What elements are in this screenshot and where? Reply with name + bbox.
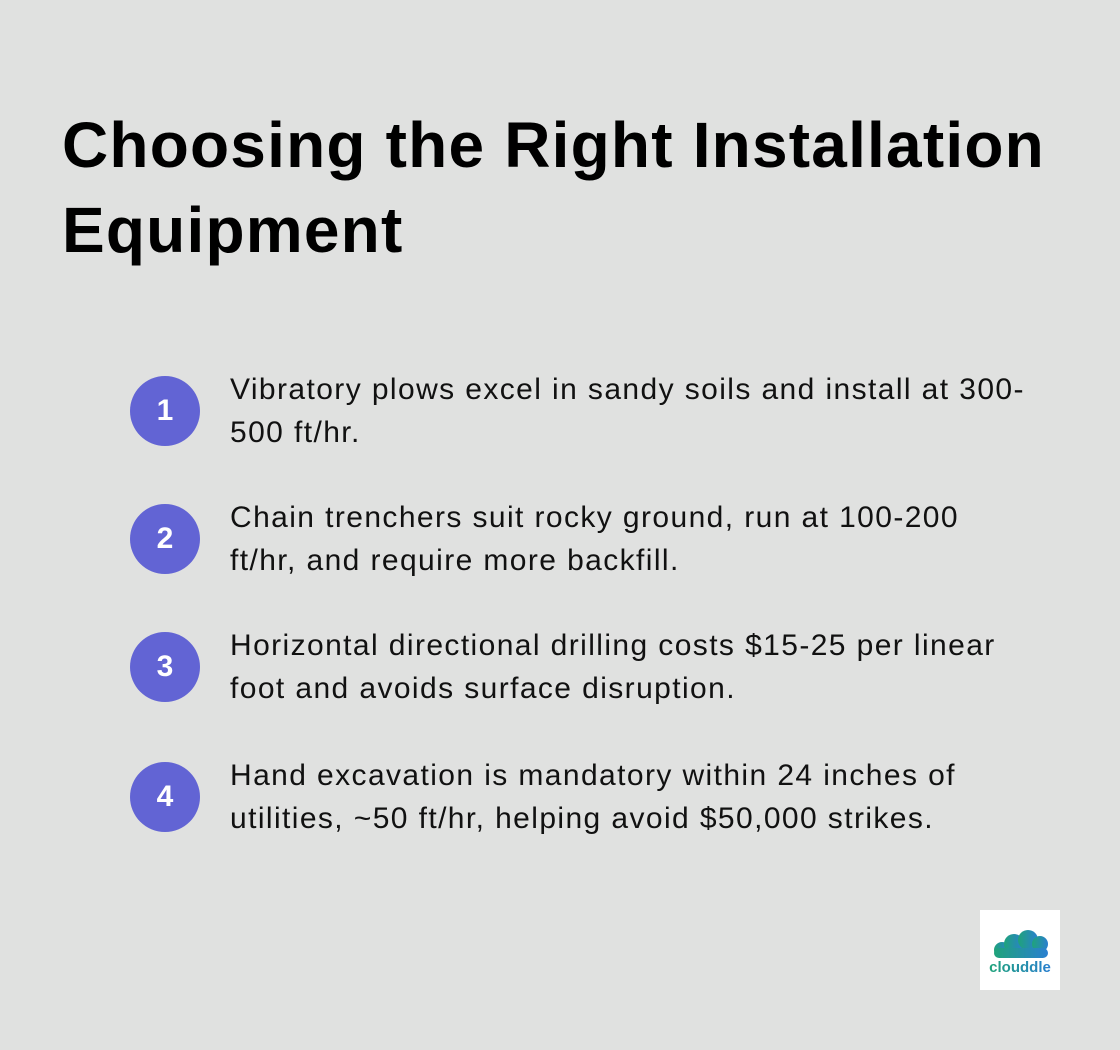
- item 2: Chain trenchers suit rocky ground, run at 100-200: [230, 501, 959, 534]
- item 2: ft/hr, and require more backfill.: [230, 544, 680, 577]
- item 1: Vibratory plows excel in sandy soils and install at 300-: [230, 373, 1025, 406]
- item 4: utilities, ~50 ft/hr, helping avoid $50,000 strikes.: [230, 802, 934, 835]
- item 1: 500 ft/hr.: [230, 416, 361, 449]
- item 2: [130, 501, 959, 577]
- item 4: Hand excavation is mandatory within 24 inches of: [230, 759, 956, 792]
- logo: [980, 910, 1060, 990]
- item 4: [130, 759, 956, 835]
- item 3: Horizontal directional drilling costs $15-25 per linear: [230, 629, 996, 662]
- item 3: [130, 629, 996, 705]
- item 3: 3: [157, 650, 173, 683]
- item 3: foot and avoids surface disruption.: [230, 672, 736, 705]
- title: Equipment: [62, 194, 403, 266]
- logo: clouddle: [989, 959, 1051, 976]
- title: Choosing the Right Installation: [62, 109, 1045, 181]
- item 4: 4: [157, 780, 173, 813]
- title: [62, 109, 1045, 266]
- item 1: [130, 373, 1025, 449]
- item 1: 1: [157, 394, 173, 427]
- item 2: 2: [157, 522, 173, 555]
